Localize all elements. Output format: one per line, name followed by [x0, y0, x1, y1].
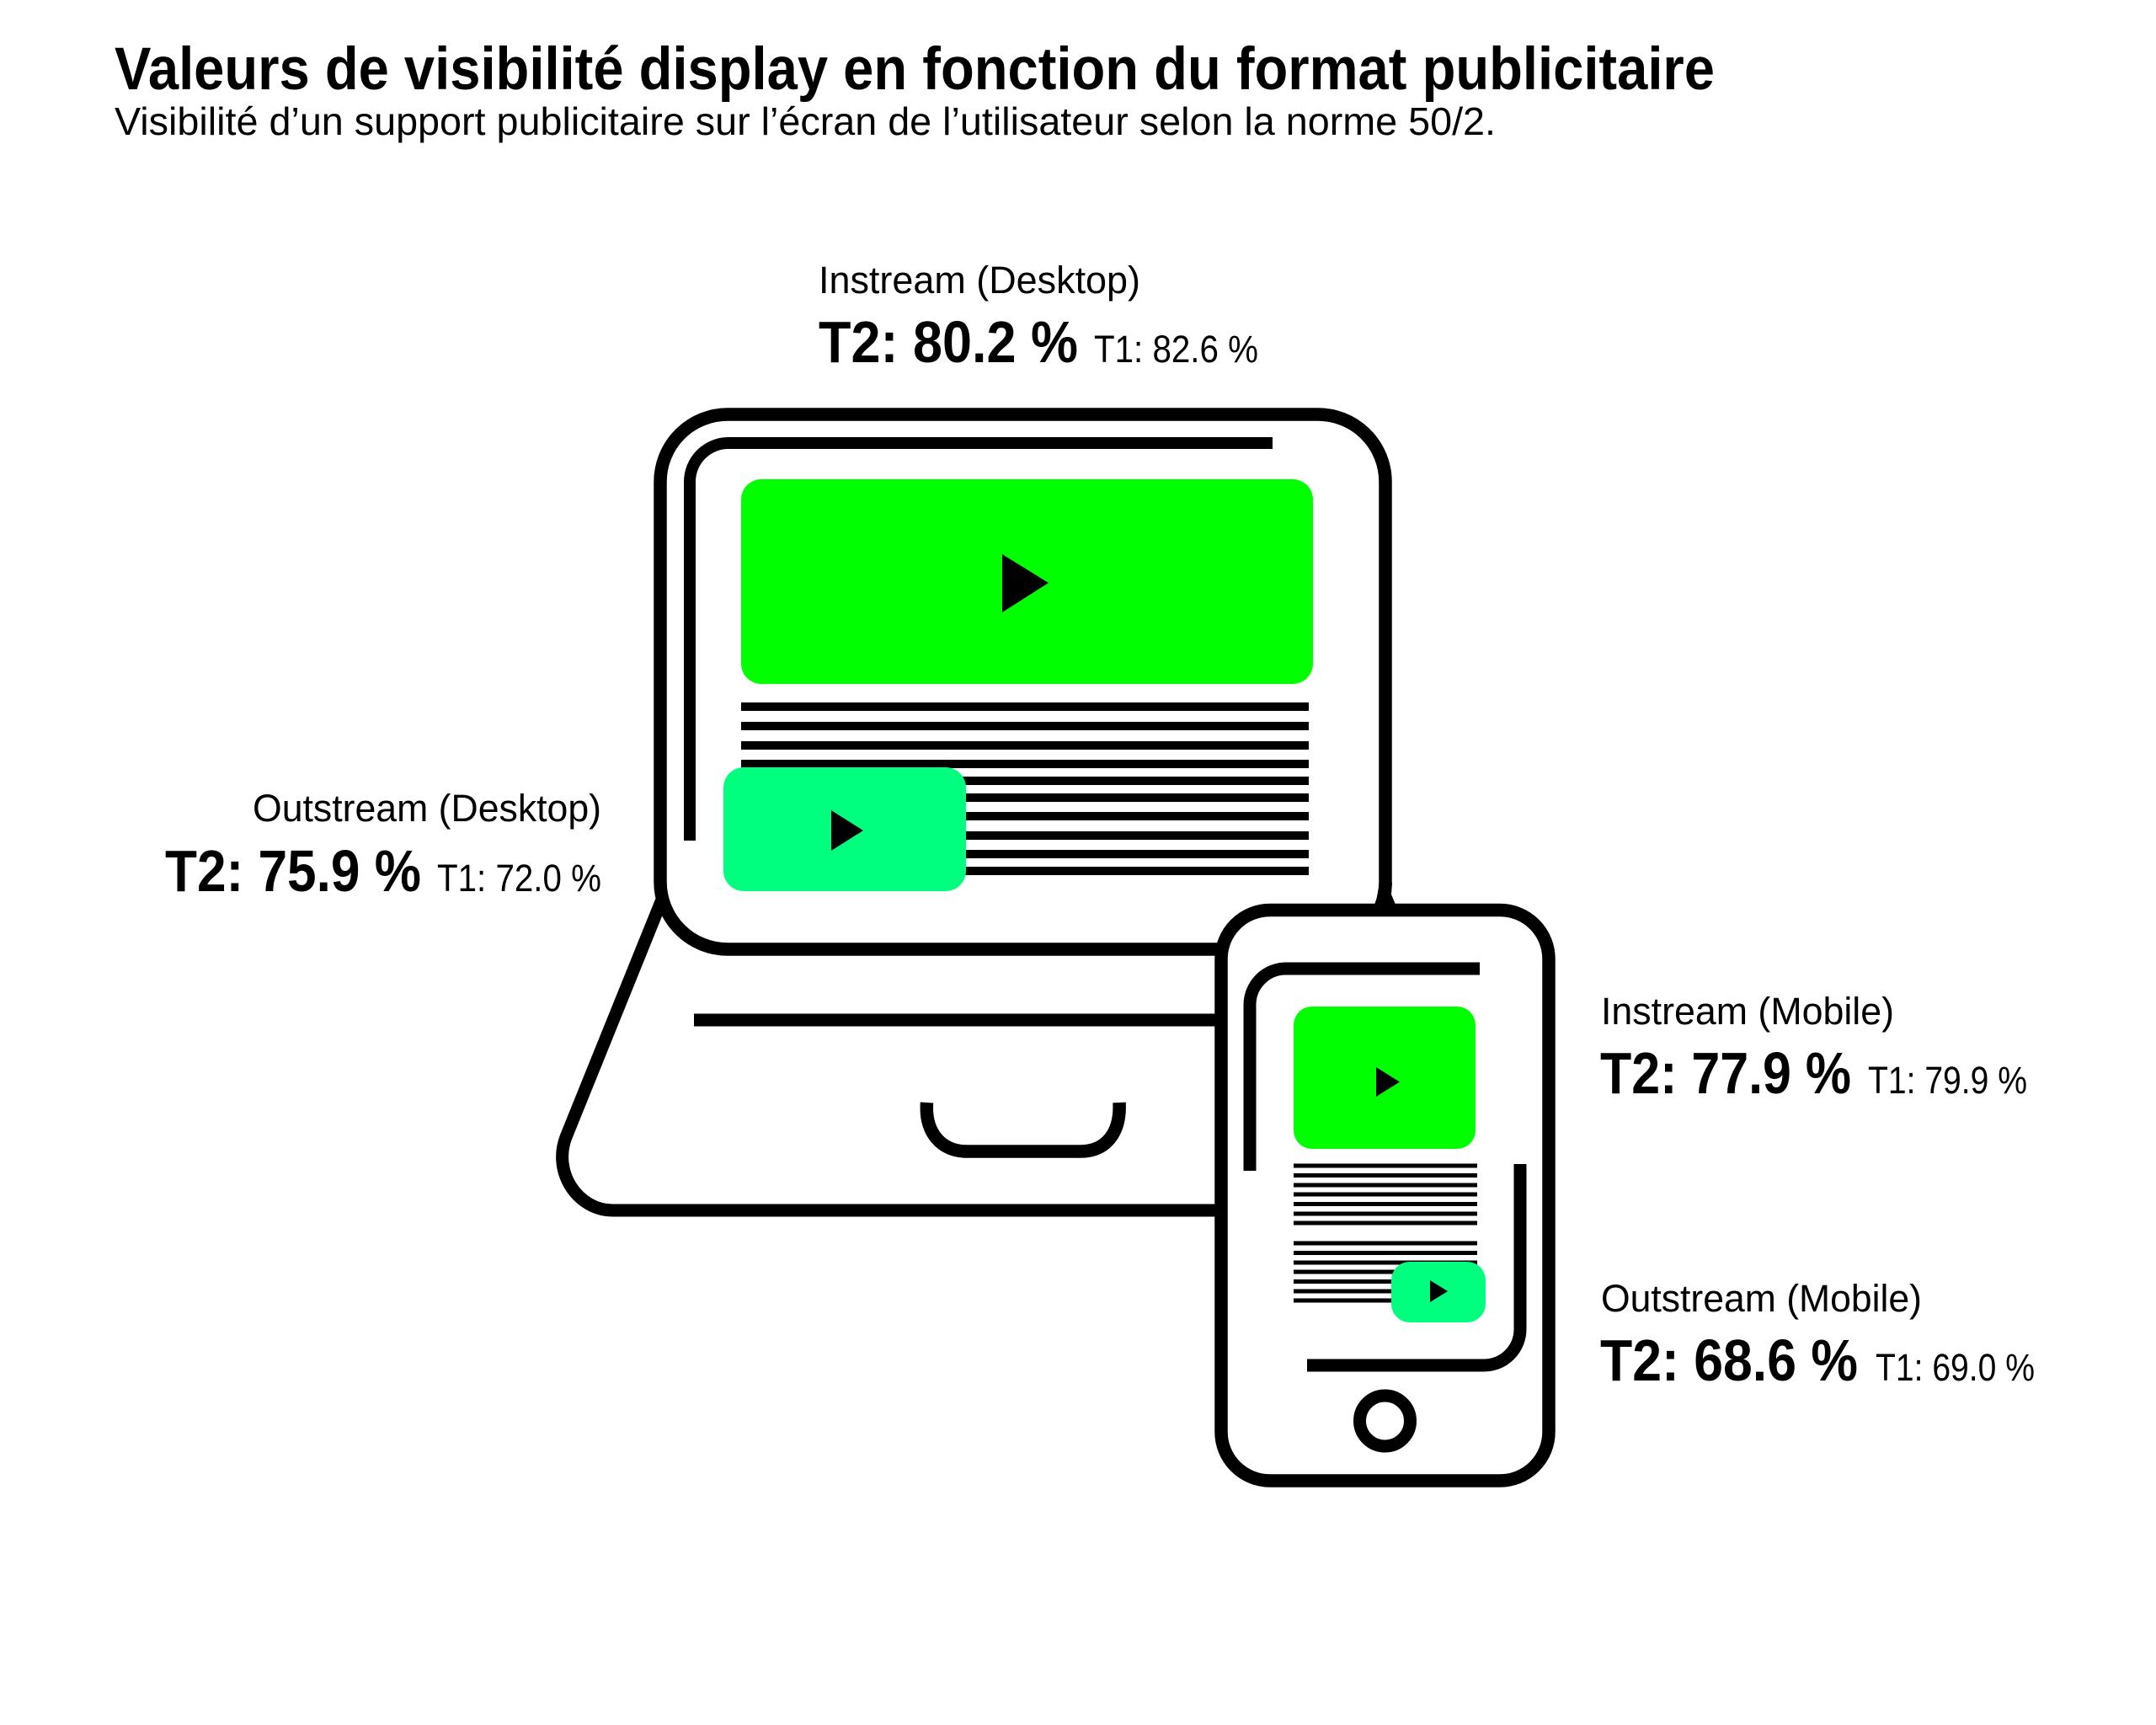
trackpad [926, 1103, 1119, 1151]
instream video mobile [1294, 1007, 1476, 1149]
label: instream desktop [819, 259, 1258, 375]
title: Valeurs de visibilité display en fonction du format publicitaire [115, 36, 1715, 103]
home button [1359, 1396, 1410, 1446]
label: instream mobile [1600, 990, 2027, 1106]
instream video desktop [741, 479, 1313, 684]
outstream video mobile [1391, 1262, 1486, 1322]
label: instream mobile: T2: 77.9 % [1600, 1040, 1851, 1106]
label: outstream desktop: T1: 72.0 % [437, 857, 601, 900]
subtitle: Visibilité d’un support publicitaire sur l’écran de l’utilisateur selon la norme 50/2. [115, 99, 1496, 143]
label: instream desktop: Instream (Desktop) [819, 259, 1140, 302]
label: instream desktop: T1: 82.6 % [1094, 328, 1258, 371]
article text lines [1294, 1164, 1477, 1302]
article text lines [741, 702, 1309, 875]
screen inner reflection line [690, 443, 1273, 841]
label: outstream desktop [165, 787, 601, 904]
label: outstream mobile: T1: 69.0 % [1876, 1346, 2035, 1389]
phone body [1221, 910, 1549, 1481]
phone top inner line [1250, 969, 1480, 1171]
keyboard line [694, 1014, 1238, 1026]
phone bottom inner line [1307, 1164, 1520, 1365]
laptop hinge [1375, 883, 1396, 906]
label: outstream desktop: T2: 75.9 % [165, 838, 421, 904]
label: outstream mobile: T2: 68.6 % [1600, 1327, 1858, 1393]
outstream video desktop [723, 767, 966, 891]
label: instream desktop: T2: 80.2 % [819, 309, 1078, 375]
label: instream mobile: T1: 79.9 % [1868, 1059, 2027, 1102]
label: outstream mobile [1600, 1277, 2035, 1393]
label: outstream mobile: Outstream (Mobile) [1601, 1277, 1922, 1320]
icon: smartphone [1221, 910, 1549, 1481]
label: instream mobile: Instream (Mobile) [1601, 990, 1894, 1033]
laptop base [563, 900, 1263, 1210]
label: outstream desktop: Outstream (Desktop) [253, 787, 601, 830]
icon: laptop [563, 414, 1396, 1210]
laptop screen frame [660, 414, 1385, 949]
